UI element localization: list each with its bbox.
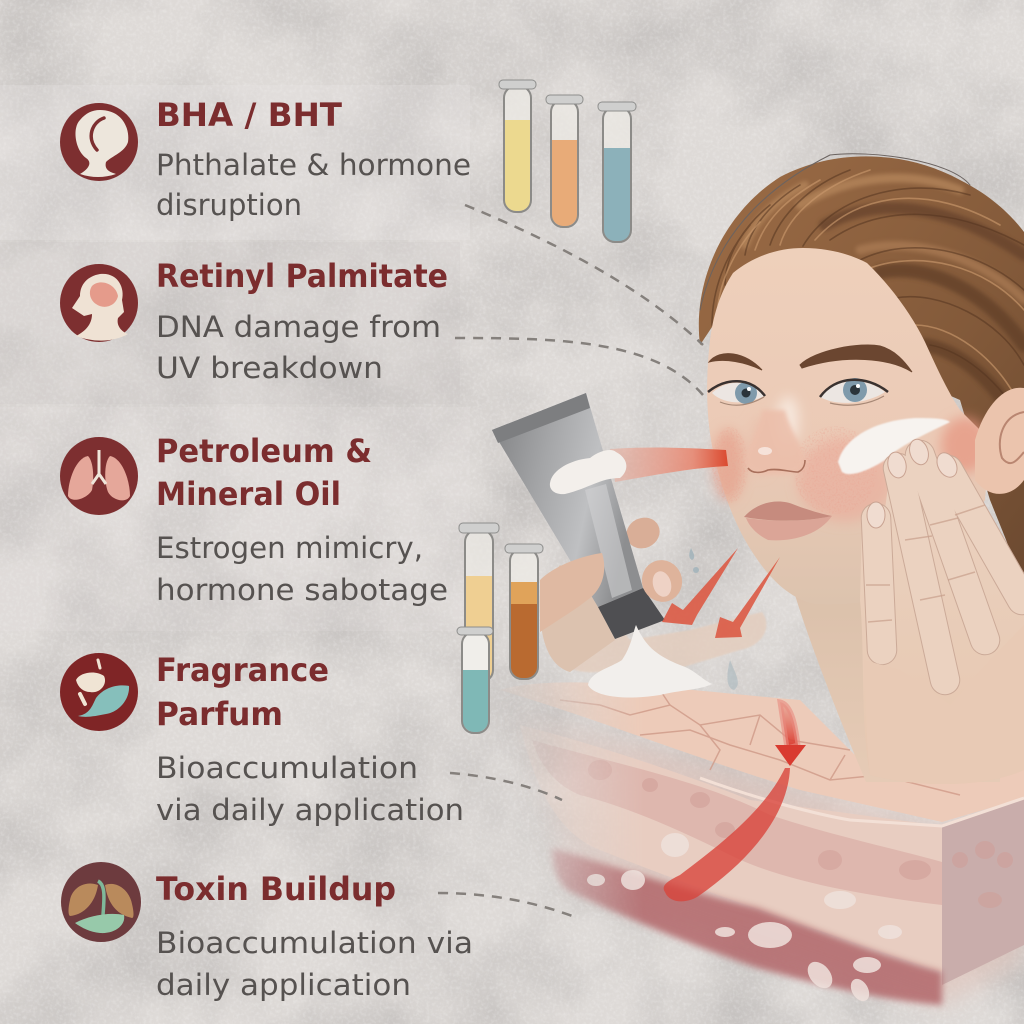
description: Bioaccumulation — [156, 751, 418, 785]
row: Fragrance Parfum: via daily application — [156, 793, 464, 827]
row: Fragrance Parfum — [60, 651, 464, 827]
water droplets — [689, 548, 738, 690]
freckles — [712, 427, 748, 503]
cream blob — [588, 625, 712, 698]
heading: Petroleum & — [156, 432, 372, 470]
hand holding the tube, back fingers — [540, 512, 665, 672]
row: Retinyl Palmitate — [60, 257, 448, 385]
description: Phthalate & hormone — [156, 148, 471, 182]
tube body — [492, 393, 643, 607]
arrow head — [775, 745, 806, 766]
dark strands — [712, 170, 1024, 420]
right hand on face — [860, 437, 1024, 784]
blue tube — [598, 102, 636, 242]
heading: Fragrance — [156, 651, 329, 689]
skin block: outer fade — [565, 734, 1022, 1006]
upper finger — [621, 512, 665, 554]
orange tube — [546, 95, 583, 227]
tube cap — [598, 588, 665, 639]
connector: Retinyl Palmitate — [455, 338, 703, 395]
palm blend over finger bases — [864, 625, 1024, 784]
left eye — [708, 381, 765, 405]
cream on cheek — [838, 418, 950, 474]
icon: seeds and sprout — [61, 862, 141, 942]
broad hair shading — [745, 178, 1024, 430]
nose — [745, 410, 805, 475]
skin block: cell blobs — [588, 760, 1013, 908]
light strands — [718, 170, 1024, 405]
lower finger — [636, 554, 688, 608]
description: Estrogen mimicry, — [156, 531, 423, 565]
upper test tubes — [499, 80, 636, 242]
lower test tubes — [457, 523, 543, 733]
row: BHA / BHT — [60, 96, 471, 222]
skin block: top surface with scales — [500, 682, 1024, 822]
palm and finger fill — [860, 460, 1024, 784]
icon: head silhouette — [60, 103, 138, 181]
right eyebrow — [800, 345, 912, 372]
lower lip — [746, 516, 832, 540]
row: Petroleum & Mineral Oil: Mineral Oil — [156, 475, 341, 513]
lower fingernail — [650, 569, 674, 599]
ear — [975, 388, 1024, 494]
skin block: blood layer — [552, 848, 942, 1005]
blush and freckled cheeks — [712, 396, 989, 522]
tube crimp — [492, 393, 590, 443]
connector: Toxin Buildup — [438, 893, 575, 917]
connector: Fragrance — [450, 773, 562, 800]
lips — [744, 501, 832, 540]
teal tube — [457, 627, 493, 733]
forearm behind the tube — [545, 600, 766, 672]
icon: lungs — [60, 437, 138, 515]
thumb — [540, 553, 604, 632]
skin block: pink tissue band — [532, 740, 942, 905]
amber tube — [459, 523, 499, 682]
row: Petroleum & Mineral Oil: hormone sabotage — [156, 573, 448, 607]
palm — [540, 565, 615, 672]
finger outlines — [876, 455, 1022, 680]
fly-away lines — [700, 154, 970, 310]
heading: Toxin Buildup — [156, 870, 396, 908]
skin block: dermis layer — [560, 736, 942, 967]
row: Retinyl Palmitate: UV breakdown — [156, 351, 383, 385]
red arrow into skin — [664, 702, 806, 901]
row bands behind the text list — [0, 85, 470, 631]
arrow shaft — [780, 702, 798, 748]
skin block: pale cells — [587, 833, 902, 1004]
cream on tube — [550, 450, 626, 494]
red arrow two — [715, 557, 780, 638]
tube highlight — [585, 484, 632, 598]
fingernails — [867, 437, 961, 528]
product tube — [492, 393, 665, 639]
upper lip — [744, 501, 832, 521]
row: Toxin Buildup: daily application — [156, 968, 411, 1002]
icon: head with tumour — [60, 264, 138, 342]
row: Fragrance Parfum: Parfum — [156, 695, 283, 733]
hair back and side — [699, 156, 1024, 592]
red pathway from tube to cheek — [610, 447, 728, 482]
right eye — [820, 378, 888, 405]
skin block: right side face — [942, 798, 1024, 985]
left eyebrow — [709, 354, 762, 370]
heading: BHA / BHT — [156, 96, 342, 134]
dashed connector lines — [438, 205, 703, 917]
skin block: top edge highlight — [700, 778, 1024, 826]
neck — [795, 540, 1000, 782]
skin block: scale cracks — [560, 690, 960, 795]
red arrow one — [662, 548, 738, 625]
connector: BHA / BHT — [465, 205, 703, 345]
skin cross-section block — [500, 682, 1024, 1005]
yellow tube — [499, 80, 536, 212]
description: Bioaccumulation via — [156, 926, 473, 960]
fingers — [876, 455, 1022, 680]
icon: petal and leaf — [60, 653, 138, 731]
curved red pathway — [664, 768, 790, 901]
description: DNA damage from — [156, 310, 441, 344]
row: Toxin Buildup — [61, 862, 473, 1002]
row: BHA / BHT: disruption — [156, 188, 302, 222]
face — [707, 248, 990, 604]
row: Petroleum & Mineral Oil — [60, 432, 448, 607]
finger creases — [866, 505, 985, 622]
heading: Retinyl Palmitate — [156, 257, 448, 295]
hair strands — [700, 154, 1024, 430]
brown tube — [505, 544, 543, 679]
hand holding the tube, front fingers — [540, 553, 688, 632]
